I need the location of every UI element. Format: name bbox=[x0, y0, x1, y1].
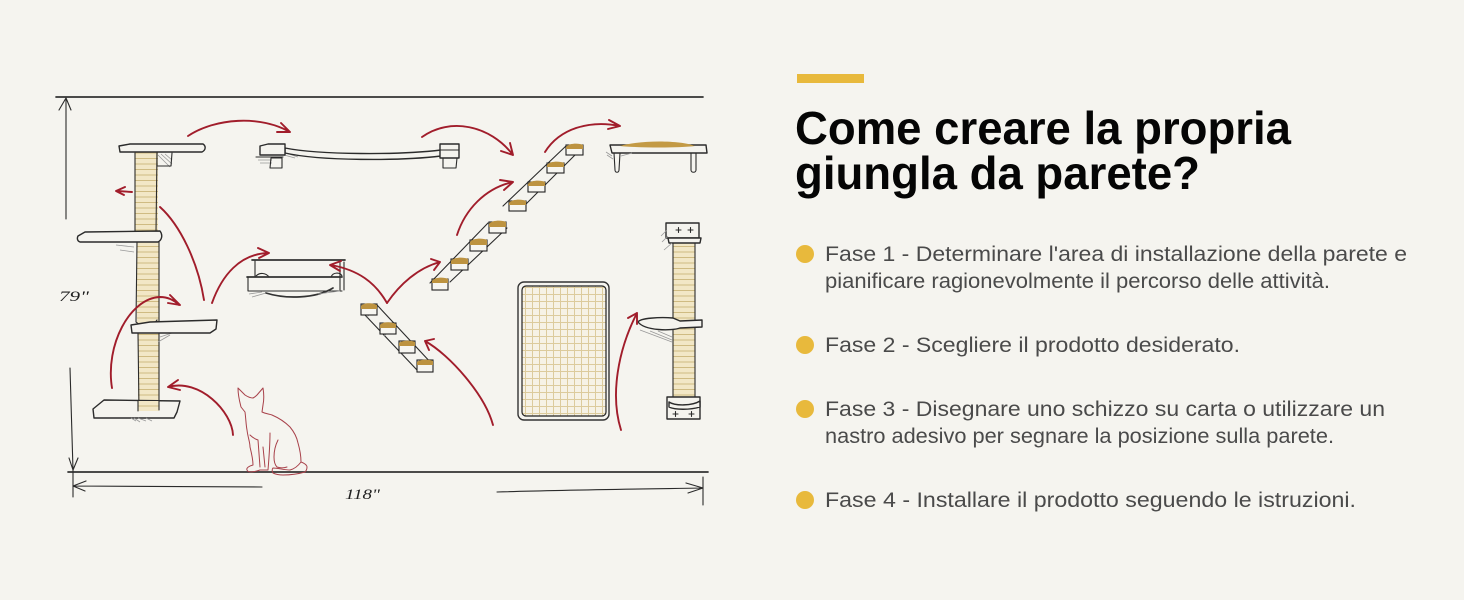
arrow: cat to base bbox=[168, 380, 233, 435]
bullet 3 bbox=[796, 400, 814, 418]
arrow: upper steps to long shelf bbox=[545, 120, 620, 152]
step 2 bbox=[796, 334, 1240, 357]
step 1 text: Fase 1 - Determinare l'area di installazione della parete e bbox=[825, 243, 1407, 266]
long wall shelf bbox=[606, 142, 707, 172]
arrow: post to bridge bbox=[188, 121, 290, 136]
left scratching post tower bbox=[77, 144, 217, 422]
title bbox=[795, 102, 1291, 199]
bed with hammock bbox=[247, 260, 345, 297]
title: Come creare la propria bbox=[795, 102, 1291, 154]
bullet 1 bbox=[796, 245, 814, 263]
accent bar bbox=[797, 74, 864, 83]
arrow: floor to dish bbox=[616, 313, 637, 430]
title: giungla da parete? bbox=[795, 147, 1200, 199]
step 4 text: Fase 4 - Installare il prodotto seguendo le istruzioni. bbox=[825, 489, 1356, 512]
step 1 text bbox=[825, 243, 1407, 293]
step 3 text bbox=[825, 398, 1385, 448]
red route arrows bbox=[111, 120, 637, 435]
step 1 bbox=[796, 243, 1407, 293]
hanging bridge bbox=[256, 144, 459, 168]
label: height 79 inches: 79" bbox=[59, 289, 90, 305]
arrow: middle to upper steps bbox=[457, 180, 513, 235]
middle step set bbox=[430, 221, 507, 290]
arrow: to bed bbox=[212, 248, 269, 303]
arrow: small left bbox=[116, 187, 132, 195]
label: width 118 inches: 118" bbox=[345, 487, 381, 503]
step 3 text: nastro adesivo per segnare la posizione sulla parete. bbox=[825, 425, 1334, 448]
step 3 text: Fase 3 - Disegnare uno schizzo su carta o utilizzare un bbox=[825, 398, 1385, 421]
right scratching post bbox=[638, 223, 702, 419]
cargo net bbox=[518, 282, 609, 420]
bullet 2 bbox=[796, 336, 814, 354]
arrow: bridge to upper steps bbox=[422, 126, 513, 155]
upper step set bbox=[503, 144, 583, 211]
dimension lines bbox=[56, 97, 708, 505]
lower step set bbox=[361, 303, 433, 372]
arrow: to third shelf bbox=[111, 295, 180, 388]
bullet 4 bbox=[796, 491, 814, 509]
panel: wall sketch bbox=[56, 97, 708, 505]
icon: sitting cat bbox=[238, 388, 307, 475]
step 3 bbox=[796, 398, 1385, 448]
arrow: long to top of post bbox=[160, 207, 204, 300]
arrow: floor to lower steps bbox=[425, 339, 493, 425]
arrow: steps to bed bbox=[330, 261, 387, 303]
step 1 text: pianificare ragionevolmente il percorso delle attività. bbox=[825, 270, 1330, 293]
step 4 bbox=[796, 489, 1356, 512]
step 2 text: Fase 2 - Scegliere il prodotto desiderato. bbox=[825, 334, 1240, 357]
arrow: steps to middle steps bbox=[387, 259, 440, 303]
